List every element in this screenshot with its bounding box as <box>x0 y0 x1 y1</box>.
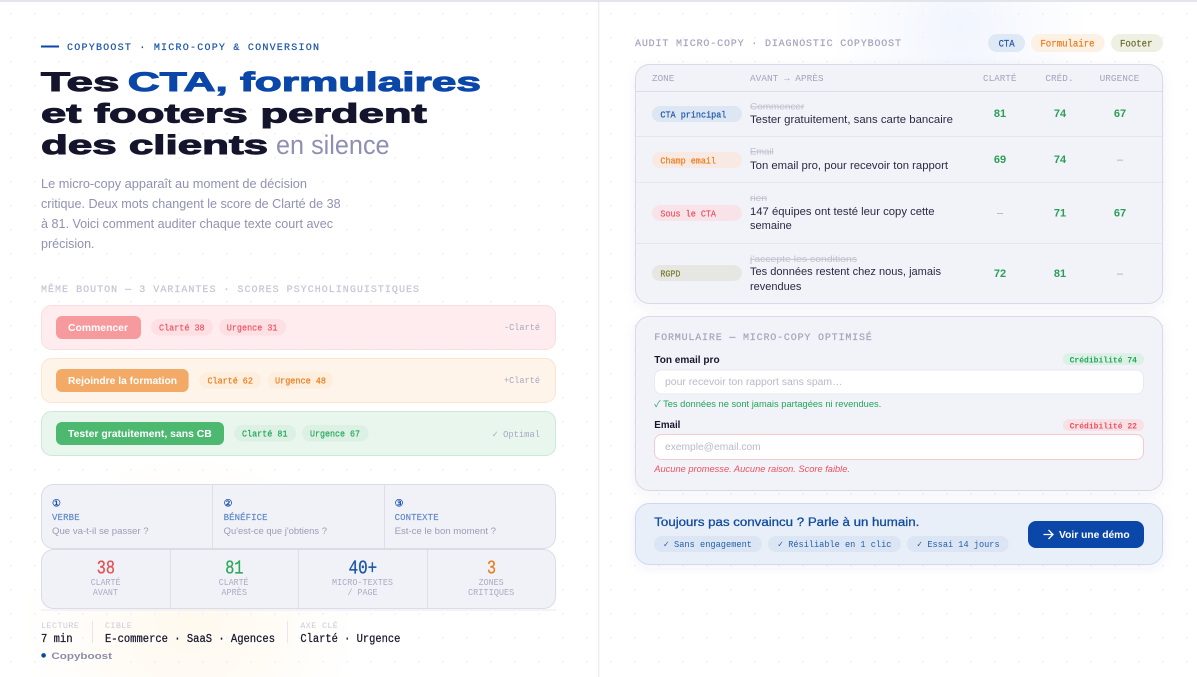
row: CTA principal: Tester gratuitement, sans carte bancaire <box>750 114 953 126</box>
title: en silence <box>276 130 390 160</box>
stat: micro-textes: MICRO-TEXTES <box>332 578 393 588</box>
field: Ton email pro: Ton email pro <box>654 354 720 366</box>
step: bénéfice: Qu'est-ce que j'obtiens ? <box>224 526 327 537</box>
pill: Résiliable: ✓ Résiliable en 1 clic <box>778 539 892 550</box>
row: RGPD: j'accepte les conditions <box>749 254 857 265</box>
button: Tester gratuitement: Tester gratuitement, sans CB <box>68 428 212 440</box>
stat: clarté avant <box>91 558 120 598</box>
pill: Urgence 67 <box>302 425 369 442</box>
pill: Clarté 38: Clarté 38 <box>159 322 205 334</box>
row: Sous le CTA: rien <box>750 193 767 204</box>
meta footer: E-commerce · SaaS · Agences <box>105 633 275 646</box>
table header: AVANT → APRÈS <box>750 73 824 84</box>
intro paragraph <box>41 177 341 251</box>
row: RGPD: – <box>1117 268 1124 280</box>
stat: micro-textes <box>332 558 393 598</box>
form title: FORMULAIRE — MICRO-COPY OPTIMISÉ <box>654 330 872 344</box>
brand mark <box>41 651 113 662</box>
card: variant Commencer <box>42 306 556 350</box>
row: Sous le CTA: semaine <box>750 220 792 232</box>
step: verbe: Que va-t-il se passer ? <box>52 526 149 537</box>
row: Champ email: Email <box>750 146 774 158</box>
meta footer: CIBLE <box>105 621 132 631</box>
title: des clients <box>41 130 268 160</box>
button: Voir une démo <box>1028 521 1144 548</box>
pill: Résiliable <box>768 536 901 552</box>
pill: Clarté 62: Clarté 62 <box>208 376 253 386</box>
pill: Clarté 62 <box>199 372 261 388</box>
section label: variants: MÊME BOUTON — 3 VARIANTES · SCORES PSYCHOLINGUISTIQUES <box>41 282 419 296</box>
panel: call to action <box>636 504 1162 564</box>
step: verbe: VERBE <box>52 513 80 523</box>
field: Ton email pro: Crédibilité 74 <box>1070 355 1137 365</box>
button: Rejoindre la formation <box>56 369 189 392</box>
step: contexte: ③ <box>395 498 404 510</box>
button: Commencer <box>56 316 141 339</box>
row: Champ email: Champ email <box>660 156 716 166</box>
table header: URGENCE <box>1100 73 1140 84</box>
row: Champ email: 69 <box>994 154 1006 166</box>
meta footer: 7 min <box>41 633 72 646</box>
audit header <box>635 34 1163 52</box>
panel: formula steps <box>42 484 556 548</box>
row: Sous le CTA: 67 <box>1114 208 1126 220</box>
field: Ton email pro <box>654 353 1144 409</box>
icon: arrow <box>1044 530 1053 539</box>
stat: clarté avant: 38 <box>97 558 115 580</box>
field: Email: exemple@email.com <box>665 442 761 453</box>
row: CTA principal <box>652 102 1126 126</box>
meta footer <box>41 620 400 646</box>
button: Commencer: Commencer <box>68 322 128 334</box>
button: Voir une démo: Voir une démo <box>1059 530 1130 541</box>
field: Email: Aucune promesse. Aucune raison. Score faible. <box>653 464 850 474</box>
panel: form <box>636 316 1162 490</box>
pill: Essai <box>907 536 1009 552</box>
stat: clarté après: APRÈS <box>221 587 247 598</box>
verdict: -Clarté <box>504 322 540 333</box>
stat: zones critiques <box>468 558 514 598</box>
stat: clarté avant: AVANT <box>93 588 118 598</box>
row: CTA principal: CTA principal <box>660 110 727 120</box>
row: CTA principal: 81 <box>994 108 1006 120</box>
verdict: ✓ Optimal <box>492 429 540 440</box>
legend: Footer: Footer <box>1120 40 1152 50</box>
row: RGPD: Tes données restent chez nous, jamais <box>750 266 941 278</box>
pill: Urgence 48 <box>268 372 333 388</box>
row: Champ email: – <box>1117 154 1124 166</box>
step: contexte: CONTEXTE <box>395 513 439 523</box>
field: Email <box>653 419 1144 474</box>
field: Email: Crédibilité 22 <box>1070 421 1137 431</box>
button: Tester gratuitement <box>56 422 224 445</box>
row: CTA principal: 74 <box>1054 108 1067 120</box>
row: Sous le CTA: 71 <box>1054 208 1066 220</box>
audit header: AUDIT MICRO-COPY · DIAGNOSTIC COPYBOOST <box>635 39 901 50</box>
row: CTA principal: 67 <box>1114 108 1126 120</box>
row: Sous le CTA: 147 équipes ont testé leur copy cette <box>750 206 935 218</box>
row: Sous le CTA: Sous le CTA <box>660 208 716 220</box>
intro paragraph: précision. <box>41 237 94 251</box>
row: RGPD: revendues <box>750 281 802 293</box>
button: Rejoindre la formation: Rejoindre la formation <box>68 375 177 387</box>
pill: Clarté 81: Clarté 81 <box>242 428 288 440</box>
stat: clarté après <box>219 558 248 598</box>
row: RGPD <box>652 254 1124 293</box>
step: bénéfice: ② <box>224 498 233 510</box>
step: contexte: Est-ce le bon moment ? <box>395 526 496 537</box>
title: Tes <box>41 67 119 97</box>
legend: CTA: CTA <box>999 40 1015 50</box>
title: et footers perdent <box>41 98 427 128</box>
pill: Clarté 81 <box>234 425 296 442</box>
step: contexte <box>395 498 496 537</box>
panel: audit table <box>636 64 1162 304</box>
legend: Formulaire: Formulaire <box>1040 38 1095 50</box>
intro paragraph: Le micro-copy apparaît au moment de décision <box>41 177 307 191</box>
pill: Sans engagement: ✓ Sans engagement <box>664 539 752 550</box>
step: bénéfice <box>224 498 327 537</box>
stat: micro-textes: 40+ <box>349 558 377 580</box>
field: Ton email pro: ✓ Tes données ne sont jamais partagées ni revendues. <box>654 399 881 409</box>
verdict: +Clarté <box>504 375 540 386</box>
stat: clarté après: 81 <box>225 558 243 580</box>
pill: Sans engagement <box>654 536 762 552</box>
table header: CLARTÉ <box>983 73 1017 84</box>
card: variant Rejoindre <box>42 358 556 402</box>
pill: Urgence 31 <box>219 319 286 336</box>
table header <box>652 73 1140 84</box>
row: Champ email: Ton email pro, pour recevoir ton rapport <box>750 160 948 172</box>
field: Email: Email <box>654 419 680 431</box>
title: CTA, formulaires <box>128 67 481 97</box>
step: verbe <box>52 498 149 537</box>
title <box>41 67 481 160</box>
card: variant Tester <box>42 412 556 456</box>
stat: zones critiques: CRITIQUES <box>468 588 514 598</box>
pill: Urgence 48: Urgence 48 <box>275 376 326 386</box>
row: Sous le CTA <box>652 193 1126 232</box>
pill: Urgence 31: Urgence 31 <box>227 322 278 334</box>
step: verbe: ① <box>52 498 61 510</box>
stat: zones critiques: 3 <box>487 558 496 580</box>
stat: micro-textes: / PAGE <box>348 588 378 598</box>
row: RGPD: RGPD <box>660 268 681 280</box>
pill: Essai: ✓ Essai 14 jours <box>917 539 1000 550</box>
row: CTA principal: Commencer <box>750 102 804 112</box>
row: Champ email: 74 <box>1054 154 1067 166</box>
meta footer: Clarté · Urgence <box>300 633 400 646</box>
brand mark: Copyboost <box>51 651 113 662</box>
row: Sous le CTA: – <box>997 208 1004 220</box>
panel: key stats <box>42 550 556 608</box>
legend: Formulaire <box>1031 34 1105 52</box>
intro paragraph: critique. Deux mots changent le score de Clarté de 38 <box>41 197 341 211</box>
cta heading: Toujours pas convaincu ? Parle à un humain. <box>654 517 919 529</box>
step: bénéfice: BÉNÉFICE <box>224 512 268 523</box>
meta footer: LECTURE <box>41 621 79 631</box>
stat: clarté avant: CLARTÉ <box>91 577 120 588</box>
stat: clarté après: CLARTÉ <box>219 577 248 588</box>
intro paragraph: à 81. Voici comment auditer chaque texte court avec <box>41 217 333 231</box>
row: RGPD: 81 <box>1054 268 1066 280</box>
legend: Footer <box>1111 34 1163 52</box>
row: RGPD: 72 <box>994 268 1006 280</box>
field: Ton email pro: pour recevoir ton rapport sans spam… <box>665 377 842 388</box>
eyebrow: COPYBOOST · MICRO-COPY & CONVERSION <box>67 43 319 54</box>
row: Champ email <box>652 146 1124 172</box>
stat: zones critiques: ZONES <box>479 578 504 588</box>
table header: ZONE <box>652 73 675 84</box>
pill: Clarté 38 <box>151 319 213 336</box>
legend: CTA <box>988 34 1025 52</box>
meta footer: AXE CLÉ <box>300 620 338 631</box>
pill: Urgence 67: Urgence 67 <box>310 428 360 440</box>
table header: CRÉD. <box>1045 73 1074 84</box>
